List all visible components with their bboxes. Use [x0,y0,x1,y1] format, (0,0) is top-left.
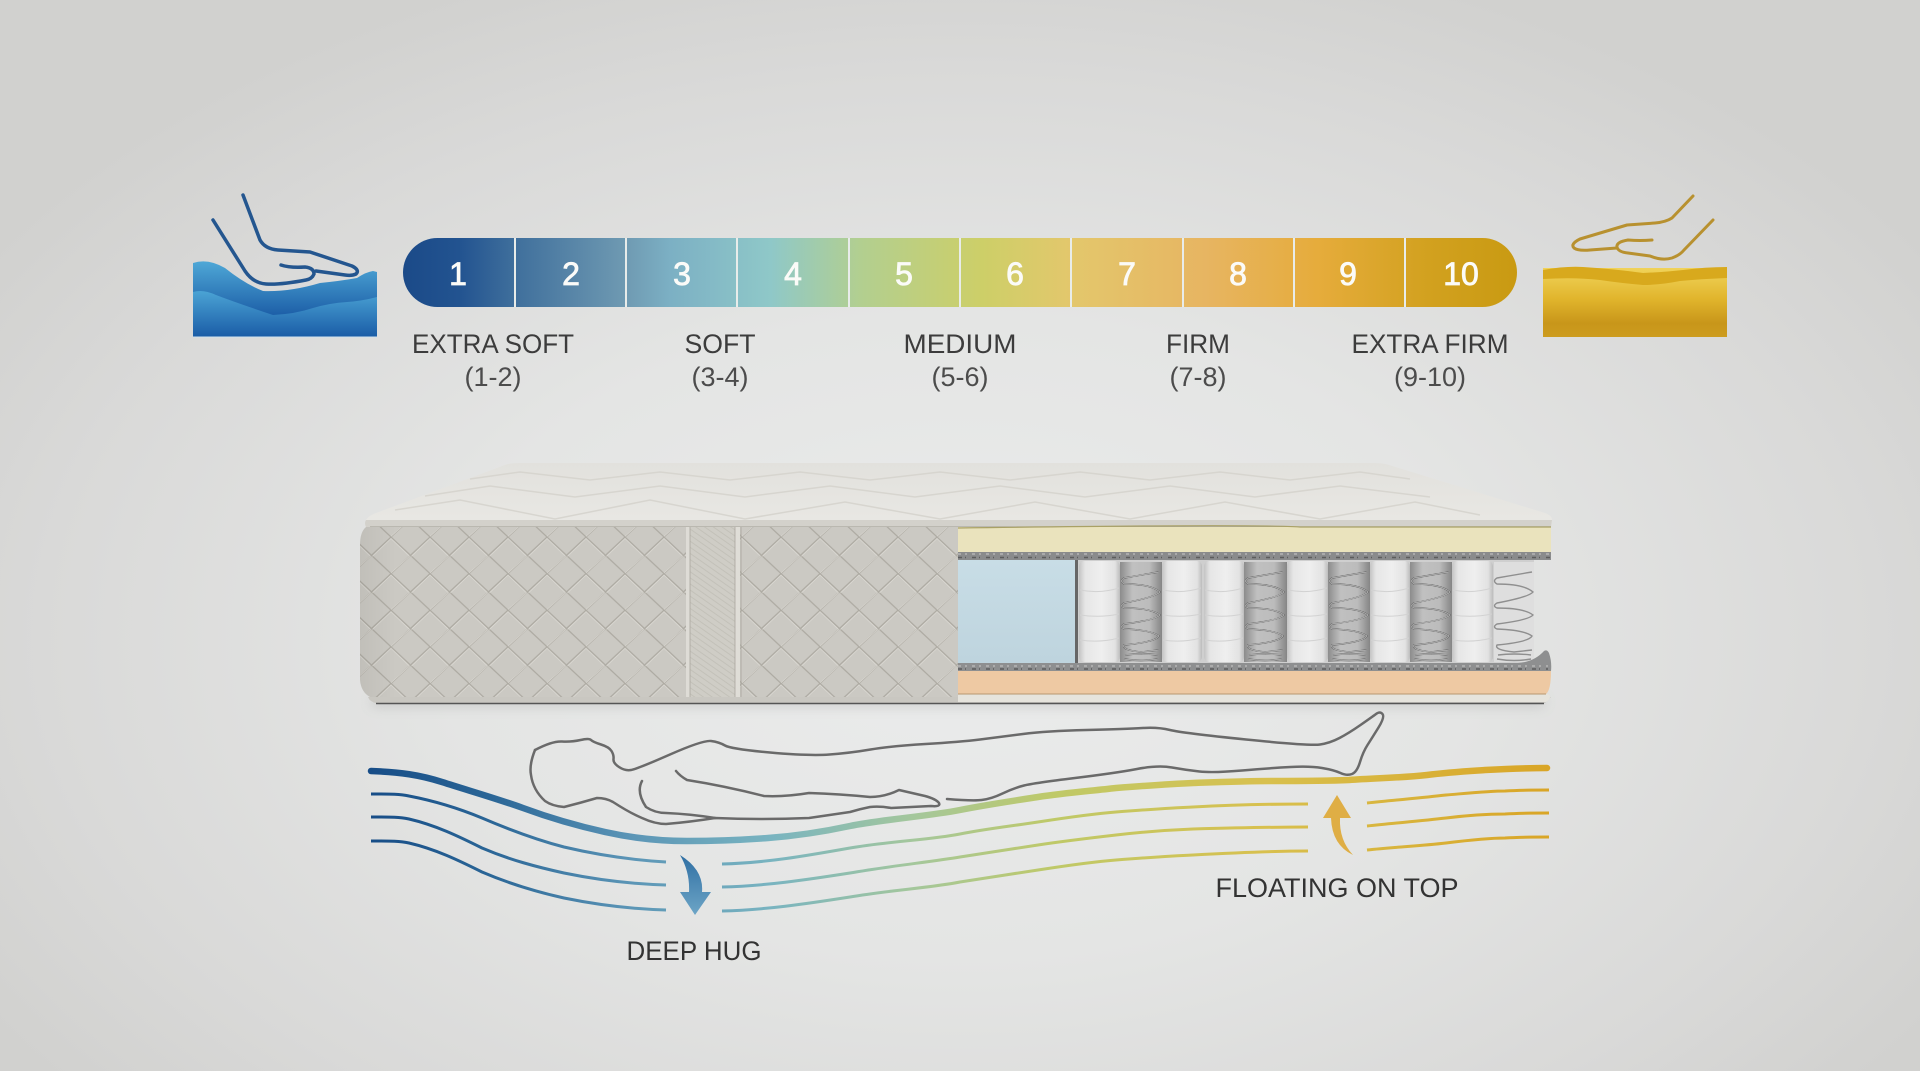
floor shadow [372,698,1544,706]
label: extra firm: (9-10) [1394,362,1466,392]
label: medium: (5-6) [931,362,989,392]
label: extra firm: EXTRA FIRM [1352,329,1508,359]
scale numbers: 1 [449,256,467,292]
wrapped pocket coils [1079,561,1493,662]
sleeper body outline [530,712,1383,824]
scale numbers: 9 [1339,256,1357,292]
label: extra firm [1352,329,1508,392]
scale numbers [449,256,1479,292]
label: medium [904,329,1016,392]
top piping [365,520,1552,527]
label: medium: MEDIUM [904,329,1016,359]
label: firm: (7-8) [1169,362,1227,392]
label: soft: SOFT [684,329,756,359]
label: firm: FIRM [1166,329,1230,359]
open coils [1120,562,1534,662]
scale numbers: 6 [1006,256,1024,292]
firmness labels [412,329,1508,392]
quilted side panel [360,527,958,697]
icon: firm foam with hovering hand [1543,196,1727,337]
label: firm [1166,329,1230,392]
right underlying lines [1367,790,1549,850]
scale numbers: 2 [562,256,580,292]
label: deep hug: DEEP HUG [626,936,762,966]
label: extra soft [412,329,574,392]
scale numbers: 4 [784,256,802,292]
soft-to-firm sinkage lines [371,768,1549,911]
firmness scale bar [403,238,1517,307]
scale numbers: 10 [1443,256,1479,292]
arrow: sinking down [680,855,711,915]
yellow comfort foam layer [958,526,1551,552]
side strap [686,527,741,697]
upper grey felt layer [958,552,1551,560]
scale numbers: 7 [1118,256,1136,292]
middle underlying lines [722,804,1308,911]
head, torso and arm [530,750,939,824]
label: floating on top: FLOATING ON TOP [1216,873,1458,903]
back and legs [535,712,1383,800]
icon: soft foam with pressing hand [193,195,377,337]
segment dividers [515,238,1405,307]
mattress cutaway [360,463,1552,706]
scale numbers: 3 [673,256,691,292]
scale numbers: 8 [1229,256,1247,292]
label: extra soft: EXTRA SOFT [412,329,574,359]
bottom piping [368,697,1551,703]
label: soft [684,329,756,392]
main surface curve [371,768,1547,841]
bar fill [403,238,1517,307]
arrow: floating up [1323,795,1353,855]
left underlying lines [371,794,666,910]
top surface [366,463,1552,527]
lower grey felt layer [958,650,1551,671]
inner arm [640,781,715,818]
scale numbers: 5 [895,256,913,292]
peach base foam layer [958,671,1551,694]
blue gel foam block [958,560,1075,663]
label: extra soft: (1-2) [464,362,522,392]
pocket spring core [1075,560,1534,663]
label: soft: (3-4) [691,362,749,392]
